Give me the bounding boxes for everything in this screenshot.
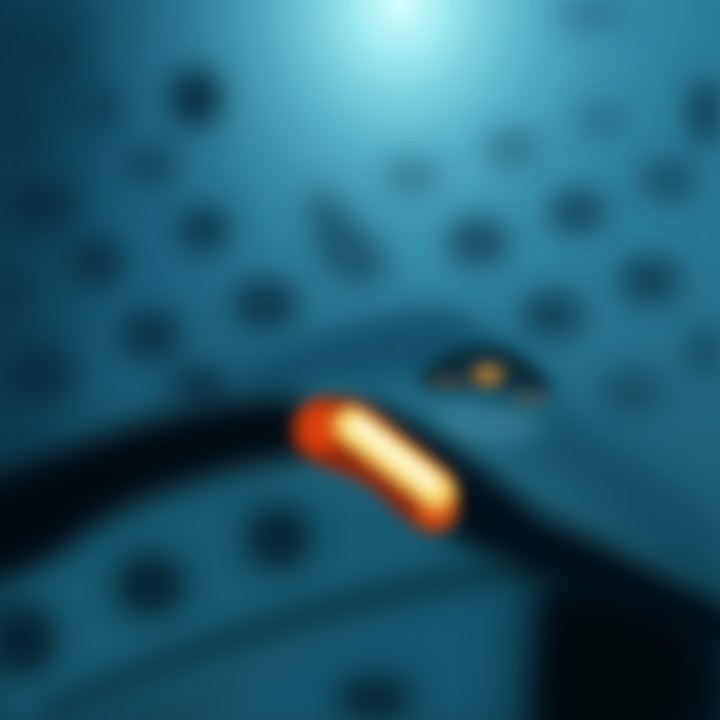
lower right fold band [420,385,690,600]
left edge shadow [0,0,150,520]
lower amber edge [416,497,456,527]
dark dimple pattern [0,0,720,414]
bottom right dark mass [505,490,720,700]
black band right of glow [320,390,720,655]
diagonal dark seam [40,565,540,716]
raised fold shape [230,307,560,420]
black cable band [0,395,360,585]
bottom right dark core [540,540,680,715]
white highlight [358,424,432,482]
lower left panel [0,481,540,720]
yellow core [352,425,436,490]
lower dark dimples [114,506,415,720]
pale area under fold [435,405,545,445]
glowing element [292,396,456,532]
lower left corner dimple [16,602,88,678]
amber core [350,425,438,492]
dark red halo [292,396,456,532]
orange red tip [298,402,342,454]
small dark component with amber highlight [420,345,550,403]
lower panel [210,580,550,720]
